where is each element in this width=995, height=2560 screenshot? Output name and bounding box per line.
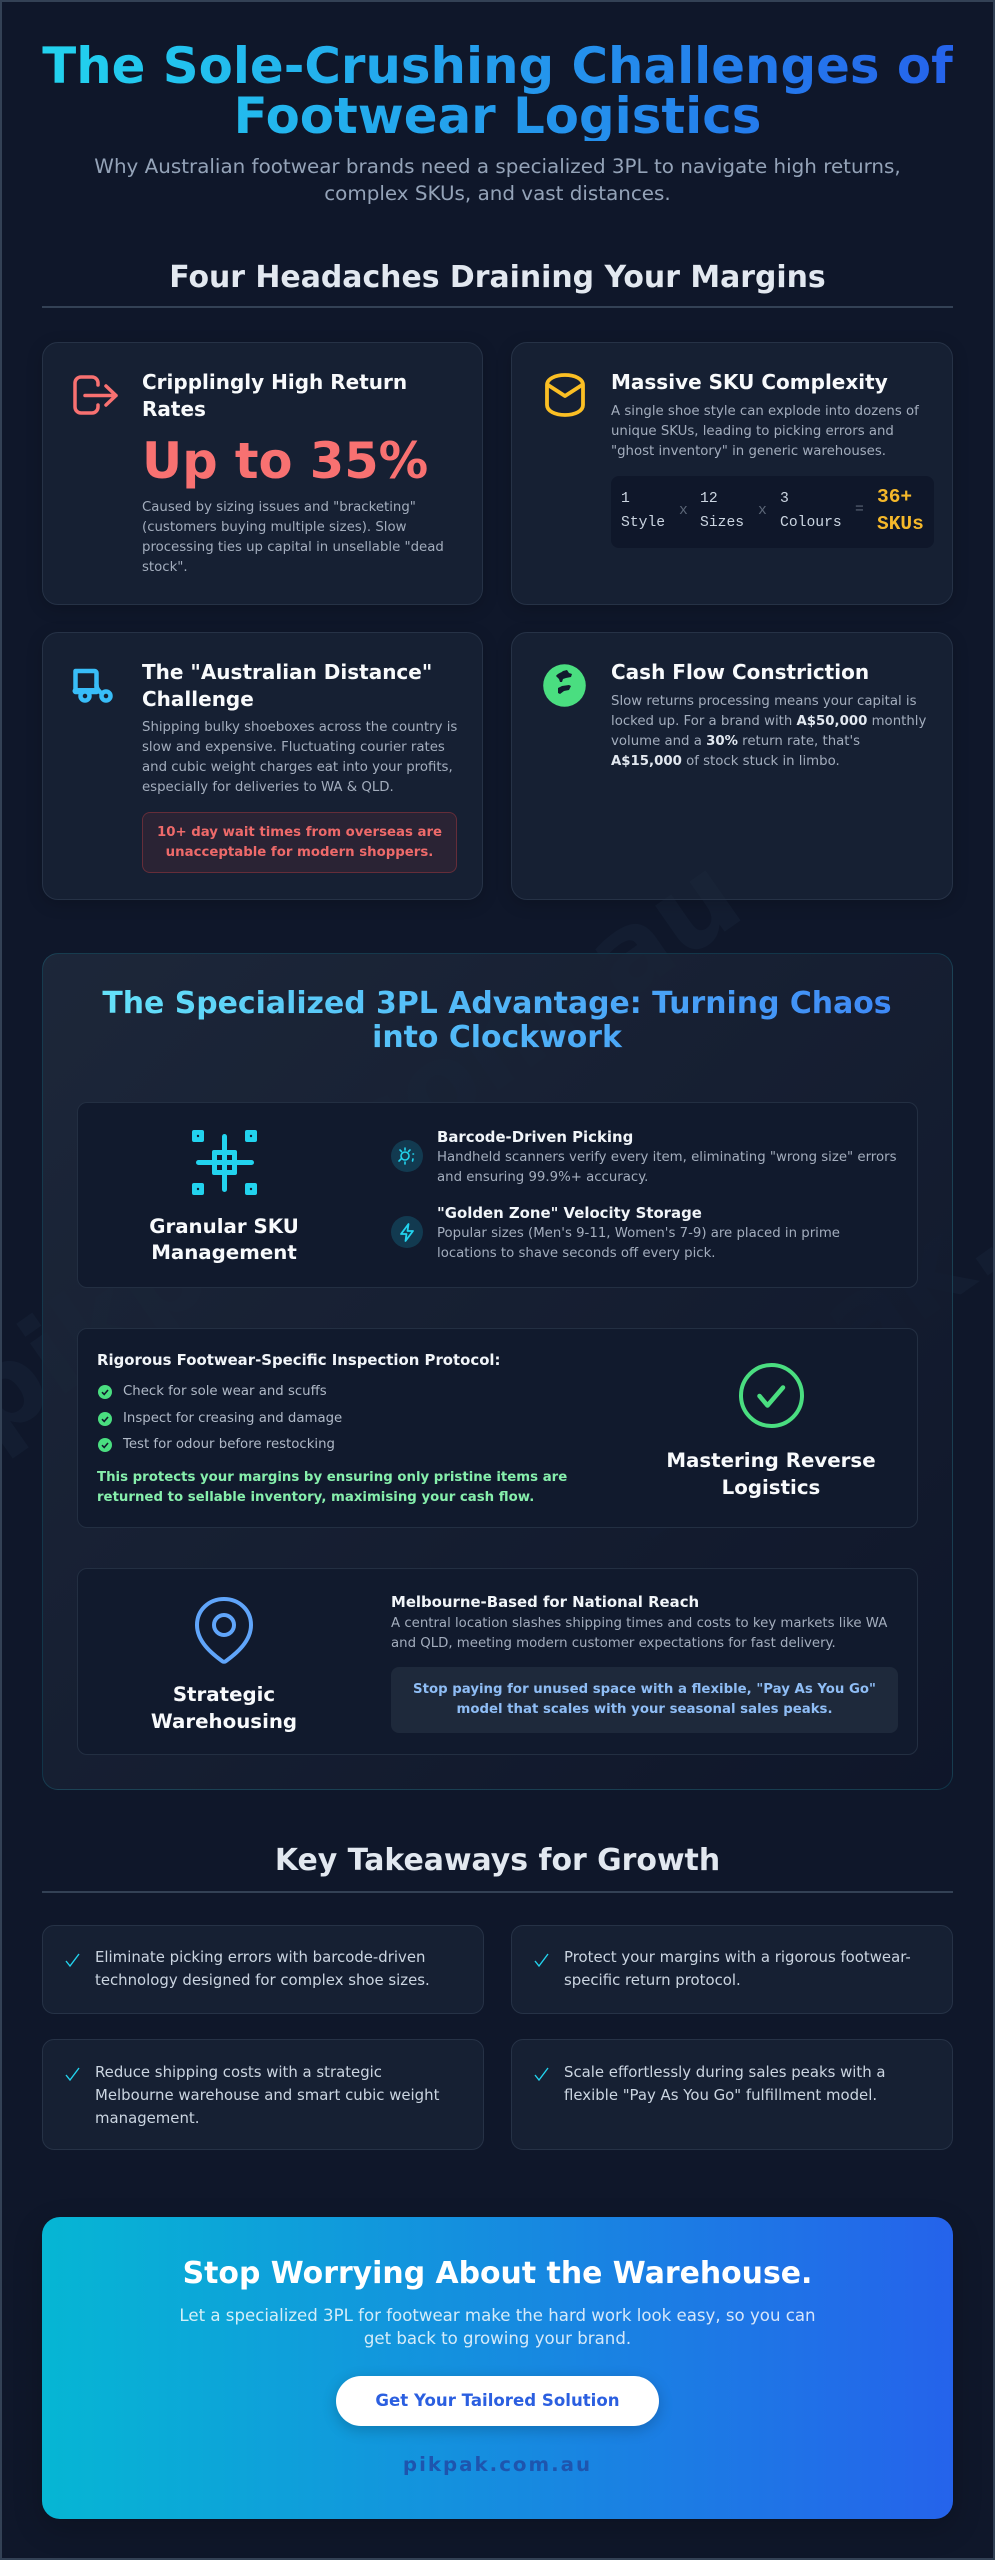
label: strategic warehousing: Strategic xyxy=(173,1683,275,1706)
operator: times: x xyxy=(679,503,688,519)
feature: melbourne title: Melbourne-Based for National Reach xyxy=(391,1593,699,1611)
text: margin protection: returned to sellable inventory, maximising your cash flow. xyxy=(97,1490,534,1505)
callout: pay as you go xyxy=(391,1667,898,1733)
title: The Sole-Crushing Challenges of xyxy=(42,37,953,95)
text: return causes: (customers buying multiple sizes). Slow xyxy=(142,520,407,535)
heading: australian distance: Challenge xyxy=(142,687,254,711)
subtitle: Why Australian footwear brands need a specialized 3PL to navigate high returns, xyxy=(94,155,901,178)
icon: delivery truck xyxy=(72,668,113,703)
formula: style xyxy=(621,491,665,530)
text: picking errors: technology designed for complex shoe sizes. xyxy=(95,1970,430,1988)
heading: inspection protocol: Rigorous Footwear-Specific Inspection Protocol: xyxy=(97,1351,500,1369)
panel: sku complexity xyxy=(511,342,953,605)
text: shipping costs xyxy=(95,2062,440,2126)
feature: barcode picking title: Barcode-Driven Picking xyxy=(437,1128,633,1146)
feature: melbourne text: and QLD, meeting modern customer expectations for fast delivery. xyxy=(391,1636,836,1651)
icon: check xyxy=(534,2068,548,2081)
text: cash flow description xyxy=(611,694,926,769)
call to action panel xyxy=(42,2217,953,2519)
icon: check xyxy=(66,1954,80,1967)
check item: creasing: Inspect for creasing and damage xyxy=(123,1410,342,1426)
text: shipping costs: Melbourne warehouse and smart cubic weight xyxy=(95,2086,439,2104)
text: distance description: slow and expensive. Fluctuating courier rates xyxy=(142,740,445,755)
panel: australian distance xyxy=(42,632,483,900)
panel: high return rates xyxy=(42,342,483,605)
icon: check xyxy=(534,1954,548,1967)
formula: sizes xyxy=(700,491,744,530)
text: cta description: Let a specialized 3PL for footwear make the hard work look easy, so you can xyxy=(179,2306,816,2325)
callout: pay as you go: Stop paying for unused space with a flexible, "Pay As You Go" xyxy=(413,1682,876,1697)
text: cta description: get back to growing your brand. xyxy=(364,2329,631,2348)
feature: barcode picking text: and ensuring 99.9%+ accuracy. xyxy=(437,1170,648,1185)
text: sku description: A single shoe style can explode into dozens of xyxy=(611,404,919,419)
text: return causes: processing ties up capital in unsellable "dead xyxy=(142,540,444,555)
section heading: four headaches: Four Headaches Draining Your Margins xyxy=(169,260,826,295)
feature: golden zone text: Popular sizes (Men's 9-11, Women's 7-9) are placed in prime xyxy=(437,1226,840,1241)
text: distance description xyxy=(142,720,457,795)
feature: golden zone title: "Golden Zone" Velocity Storage xyxy=(437,1204,702,1222)
feature: golden zone text: locations to shave seconds off every pick. xyxy=(437,1246,716,1261)
formula: result: 36+ xyxy=(877,486,912,508)
feature: golden zone text xyxy=(437,1226,840,1261)
icon: return arrow xyxy=(73,375,118,415)
section heading: key takeaways: Key Takeaways for Growth xyxy=(275,1843,720,1878)
callout: wait times xyxy=(142,812,457,873)
icon: check xyxy=(66,2068,80,2081)
text: margins: specific return protocol. xyxy=(564,1970,741,1988)
heading: australian distance: The "Australian Distance" xyxy=(142,660,432,684)
panel: cash flow xyxy=(511,632,953,900)
button: tailored solution xyxy=(336,2376,659,2426)
formula: style: 1 xyxy=(621,491,630,507)
formula: colours xyxy=(780,491,842,530)
heading: cash flow: Cash Flow Constriction xyxy=(611,660,869,684)
label: mastering reverse logistics: Logistics xyxy=(722,1476,820,1499)
text: cash flow description: volume and a 30% return rate, that's xyxy=(611,734,860,749)
text: return causes: Caused by sizing issues and "bracketing" xyxy=(142,500,416,515)
panel: strategic warehousing xyxy=(77,1568,918,1755)
heading: sku complexity: Massive SKU Complexity xyxy=(611,370,888,394)
formula: sizes: 12 xyxy=(700,491,718,507)
text: picking errors xyxy=(95,1948,430,1988)
text: margin protection: This protects your margins by ensuring only pristine items are xyxy=(97,1470,567,1485)
check item: sole wear: Check for sole wear and scuffs xyxy=(123,1384,327,1399)
heading: advantage: into Clockwork xyxy=(372,1020,622,1055)
heading: australian distance xyxy=(142,660,432,711)
text: sku description xyxy=(611,404,920,459)
text: margin protection xyxy=(97,1470,567,1505)
check item: odour: Test for odour before restocking xyxy=(123,1437,335,1452)
title xyxy=(42,41,953,141)
text: picking errors: Eliminate picking errors with barcode-driven xyxy=(95,1948,425,1966)
takeaway: shipping costs xyxy=(42,2039,484,2150)
feature: melbourne text: A central location slashes shipping times and costs to key markets like WA xyxy=(391,1616,887,1631)
heading: stop worrying: Stop Worrying About the Warehouse. xyxy=(183,2256,812,2291)
icon: cash coin xyxy=(543,664,586,707)
icon: map pin xyxy=(195,1597,253,1664)
label: mastering reverse logistics xyxy=(666,1449,876,1499)
text: distance description: and cubic weight charges eat into your profits, xyxy=(142,760,453,775)
feature: barcode picking text xyxy=(437,1150,897,1185)
title: Footwear Logistics xyxy=(234,87,761,145)
takeaway: scaling xyxy=(511,2039,953,2150)
callout: wait times: 10+ day wait times from overseas are xyxy=(157,824,442,840)
text: return causes xyxy=(142,500,444,575)
icon: sku grid xyxy=(192,1130,257,1195)
text: shipping costs: Reduce shipping costs with a strategic xyxy=(95,2062,382,2080)
icon: lightning xyxy=(391,1216,423,1248)
label: granular sku management: Management xyxy=(151,1241,297,1264)
icon: check circle xyxy=(739,1363,804,1428)
subtitle xyxy=(94,155,901,204)
brand: pikpak: pikpak.com.au xyxy=(403,2453,592,2476)
formula: sizes: Sizes xyxy=(700,514,744,530)
text: shipping costs: management. xyxy=(95,2108,199,2126)
text: sku description: unique SKUs, leading to picking errors and xyxy=(611,424,894,439)
label: granular sku management: Granular SKU xyxy=(149,1215,299,1238)
feature: barcode picking text: Handheld scanners verify every item, eliminating "wrong size" errors xyxy=(437,1150,897,1165)
operator: equals: = xyxy=(855,502,864,518)
button: tailored solution: Get Your Tailored Solution xyxy=(375,2391,620,2410)
formula: result: SKUs xyxy=(877,512,924,534)
takeaway: picking errors xyxy=(42,1925,484,2014)
stat: up to 35%: Up to 35% xyxy=(142,432,428,490)
text: scaling: flexible "Pay As You Go" fulfillment model. xyxy=(564,2086,877,2104)
formula: style: Style xyxy=(621,514,665,530)
heading: high return rates xyxy=(142,370,407,421)
subtitle: complex SKUs, and vast distances. xyxy=(324,182,671,204)
sku formula xyxy=(611,476,934,548)
label: mastering reverse logistics: Mastering Reverse xyxy=(666,1449,876,1472)
feature: melbourne text xyxy=(391,1616,888,1651)
panel: reverse logistics xyxy=(77,1328,918,1528)
text: margins: Protect your margins with a rigorous footwear- xyxy=(564,1948,911,1966)
heading: high return rates: Rates xyxy=(142,397,206,421)
takeaway: margins xyxy=(511,1925,953,2014)
formula: result xyxy=(877,486,924,534)
text: cash flow description: locked up. For a brand with A$50,000 monthly xyxy=(611,714,926,729)
panel: granular sku management xyxy=(77,1102,918,1288)
icon: box xyxy=(545,373,585,417)
text: cash flow description: A$15,000 of stock stuck in limbo. xyxy=(611,754,840,769)
heading: advantage xyxy=(43,987,951,1055)
checklist xyxy=(98,1384,342,1452)
callout: pay as you go: model that scales with your seasonal sales peaks. xyxy=(456,1702,833,1717)
label: strategic warehousing xyxy=(151,1683,297,1733)
text: margins xyxy=(564,1948,911,1988)
callout: wait times: unacceptable for modern shoppers. xyxy=(166,844,433,860)
text: sku description: "ghost inventory" in generic warehouses. xyxy=(611,444,886,459)
heading: advantage: The Specialized 3PL Advantage: Turning Chaos xyxy=(102,986,892,1021)
formula: colours: 3 xyxy=(780,491,789,507)
operator: times: x xyxy=(758,503,767,519)
text: scaling xyxy=(564,2062,886,2104)
label: strategic warehousing: Warehousing xyxy=(151,1710,297,1733)
formula: colours: Colours xyxy=(780,514,842,530)
text: scaling: Scale effortlessly during sales peaks with a xyxy=(564,2062,886,2080)
text: distance description: especially for deliveries to WA & QLD. xyxy=(142,780,394,795)
text: cash flow description: Slow returns processing means your capital is xyxy=(611,694,917,709)
label: granular sku management xyxy=(149,1215,299,1264)
text: distance description: Shipping bulky shoeboxes across the country is xyxy=(142,720,457,735)
icon: barcode picking xyxy=(391,1140,423,1172)
panel: specialized 3pl advantage xyxy=(42,953,953,1790)
text: return causes: stock". xyxy=(142,560,188,575)
text: cta description xyxy=(179,2306,816,2348)
heading: high return rates: Cripplingly High Return xyxy=(142,370,407,394)
